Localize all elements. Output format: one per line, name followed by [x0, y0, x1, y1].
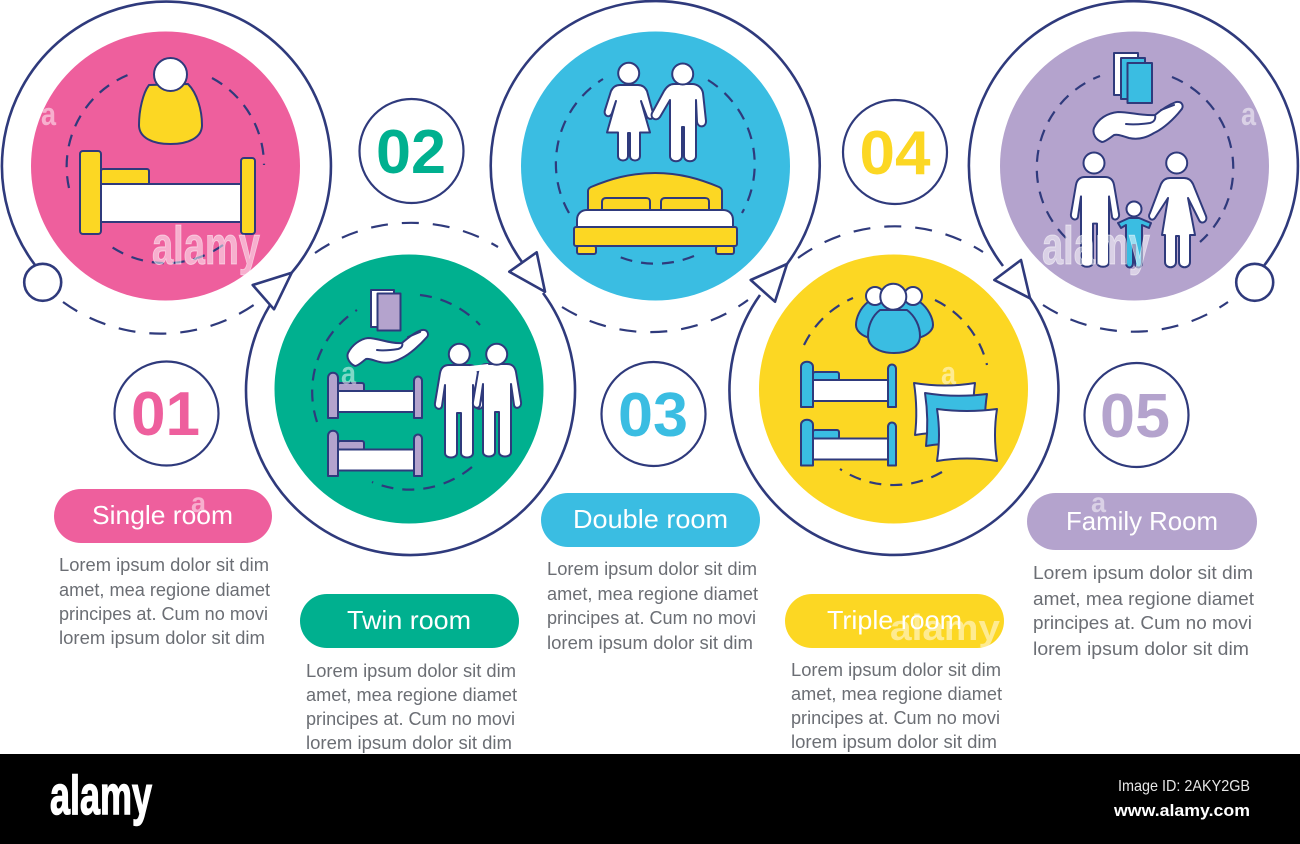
number badge 02: [360, 99, 464, 203]
icon: single bed: [80, 151, 255, 234]
dashed inner ring: [804, 298, 987, 485]
text block: double room: principes at. Cum no movi: [547, 608, 756, 628]
watermark overlay: a: [941, 355, 956, 391]
green disc: [274, 254, 544, 524]
dashed inner ring: [1037, 76, 1233, 242]
text block: twin room: principes at. Cum no movi: [306, 709, 515, 729]
label pill: single room: [54, 489, 272, 543]
icon: lower bunk bed: [328, 431, 422, 476]
label pill: double room: [541, 493, 760, 547]
text block: triple room: [791, 660, 1002, 752]
icon: child: [1118, 202, 1151, 268]
icon: upper bunk bed: [328, 373, 422, 418]
watermark overlay: a: [1241, 96, 1256, 132]
label pill: twin room: [300, 594, 519, 648]
watermark overlay: a: [1091, 487, 1106, 518]
text block: single room: amet, mea regione diamet: [59, 580, 270, 600]
footer logo: alamy: [50, 764, 152, 826]
icon: mother: [1149, 152, 1206, 267]
number badge 01: [114, 362, 218, 466]
number badge 01: 01: [131, 380, 200, 449]
text block: twin room: [306, 661, 517, 753]
label pill: triple room: [785, 594, 1004, 648]
watermark overlay: alamy: [890, 607, 1000, 648]
text block: twin room: amet, mea regione diamet: [306, 685, 517, 705]
text block: twin room: lorem ipsum dolor sit dim: [306, 733, 512, 753]
text block: single room: Lorem ipsum dolor sit dim: [59, 555, 269, 575]
panel: double room illustration: [521, 32, 790, 300]
arrow: step 3 to 4: [751, 264, 787, 302]
arrow: step 2 to 3: [509, 252, 545, 292]
purple disc: [1000, 32, 1269, 300]
text block: double room: amet, mea regione diamet: [547, 584, 758, 604]
text block: family room: principes at. Cum no movi: [1033, 613, 1252, 633]
text block: family room: lorem ipsum dolor sit dim: [1033, 639, 1249, 659]
icon: group of three: [856, 284, 933, 353]
icon: cards over hand: [347, 290, 428, 366]
image id: Image ID: 2AKY2GB: [1118, 778, 1250, 795]
dashed inner ring: [67, 73, 264, 263]
connector rings and dashed arcs: [2, 1, 1298, 555]
blue disc: [521, 32, 790, 300]
icon: upper bed: [801, 362, 896, 407]
dashed inner ring: [556, 79, 755, 264]
number badge 03: [602, 362, 706, 466]
icon: cards over hand: [1093, 53, 1183, 142]
arrow: step 1 to 2: [253, 273, 292, 309]
site url: www.alamy.com: [1113, 801, 1250, 820]
text block: single room: lorem ipsum dolor sit dim: [59, 628, 265, 648]
number badge 04: 04: [860, 119, 931, 188]
watermark overlay: [41, 96, 1256, 648]
text block: family room: Lorem ipsum dolor sit dim: [1033, 563, 1253, 583]
icon: double bed: [574, 173, 737, 254]
arrow: step 4 to 5: [994, 260, 1030, 298]
label pill: family room: Family Room: [1066, 506, 1218, 536]
text block: family room: [1033, 563, 1254, 659]
start node circle: [24, 264, 61, 301]
text block: triple room: amet, mea regione diamet: [791, 684, 1002, 704]
text block: single room: principes at. Cum no movi: [59, 604, 268, 624]
number badge 05: 05: [1100, 382, 1170, 451]
icon: single person: [139, 58, 202, 144]
text block: double room: [547, 559, 758, 653]
label pill: double room: Double room: [573, 504, 728, 534]
footer bar: [0, 754, 1300, 844]
icon: lower bed: [801, 420, 896, 466]
text block: triple room: lorem ipsum dolor sit dim: [791, 732, 997, 752]
label pill: family room: [1027, 493, 1257, 550]
label pill: triple room: Triple room: [827, 605, 962, 635]
number badge 03: 03: [618, 381, 688, 450]
text block: single room: [59, 555, 270, 648]
watermark overlay: a: [41, 96, 56, 132]
watermark overlay: alamy: [152, 216, 260, 276]
yellow disc: [759, 254, 1028, 524]
icon: couple holding hands: [605, 63, 706, 161]
panel: family room illustration: [1000, 32, 1269, 300]
text block: family room: amet, mea regione diamet: [1033, 589, 1254, 609]
text block: twin room: Lorem ipsum dolor sit dim: [306, 661, 516, 681]
icon: father: [1071, 152, 1119, 267]
panel: triple room illustration: [759, 254, 1028, 524]
text block: triple room: Lorem ipsum dolor sit dim: [791, 660, 1001, 680]
number badge 05: [1084, 363, 1188, 467]
text block: double room: lorem ipsum dolor sit dim: [547, 633, 753, 653]
panel: single room illustration: [31, 32, 300, 300]
number badge 04: [843, 100, 947, 204]
text block: double room: Lorem ipsum dolor sit dim: [547, 559, 757, 579]
label pill: twin room: Twin room: [347, 605, 471, 635]
pink disc: [31, 32, 300, 300]
watermark overlay: a: [191, 487, 206, 518]
panel: twin room illustration: [274, 254, 544, 524]
label pill: single room: Single room: [92, 500, 233, 530]
number badge 02: 02: [376, 118, 446, 187]
dashed inner ring: [312, 295, 480, 490]
watermark overlay: a: [341, 355, 356, 391]
icon: two men: [435, 344, 521, 458]
icon: three pillows: [914, 383, 997, 461]
text block: triple room: principes at. Cum no movi: [791, 708, 1000, 728]
end node circle: [1236, 264, 1273, 301]
watermark overlay: alamy: [1042, 216, 1150, 276]
